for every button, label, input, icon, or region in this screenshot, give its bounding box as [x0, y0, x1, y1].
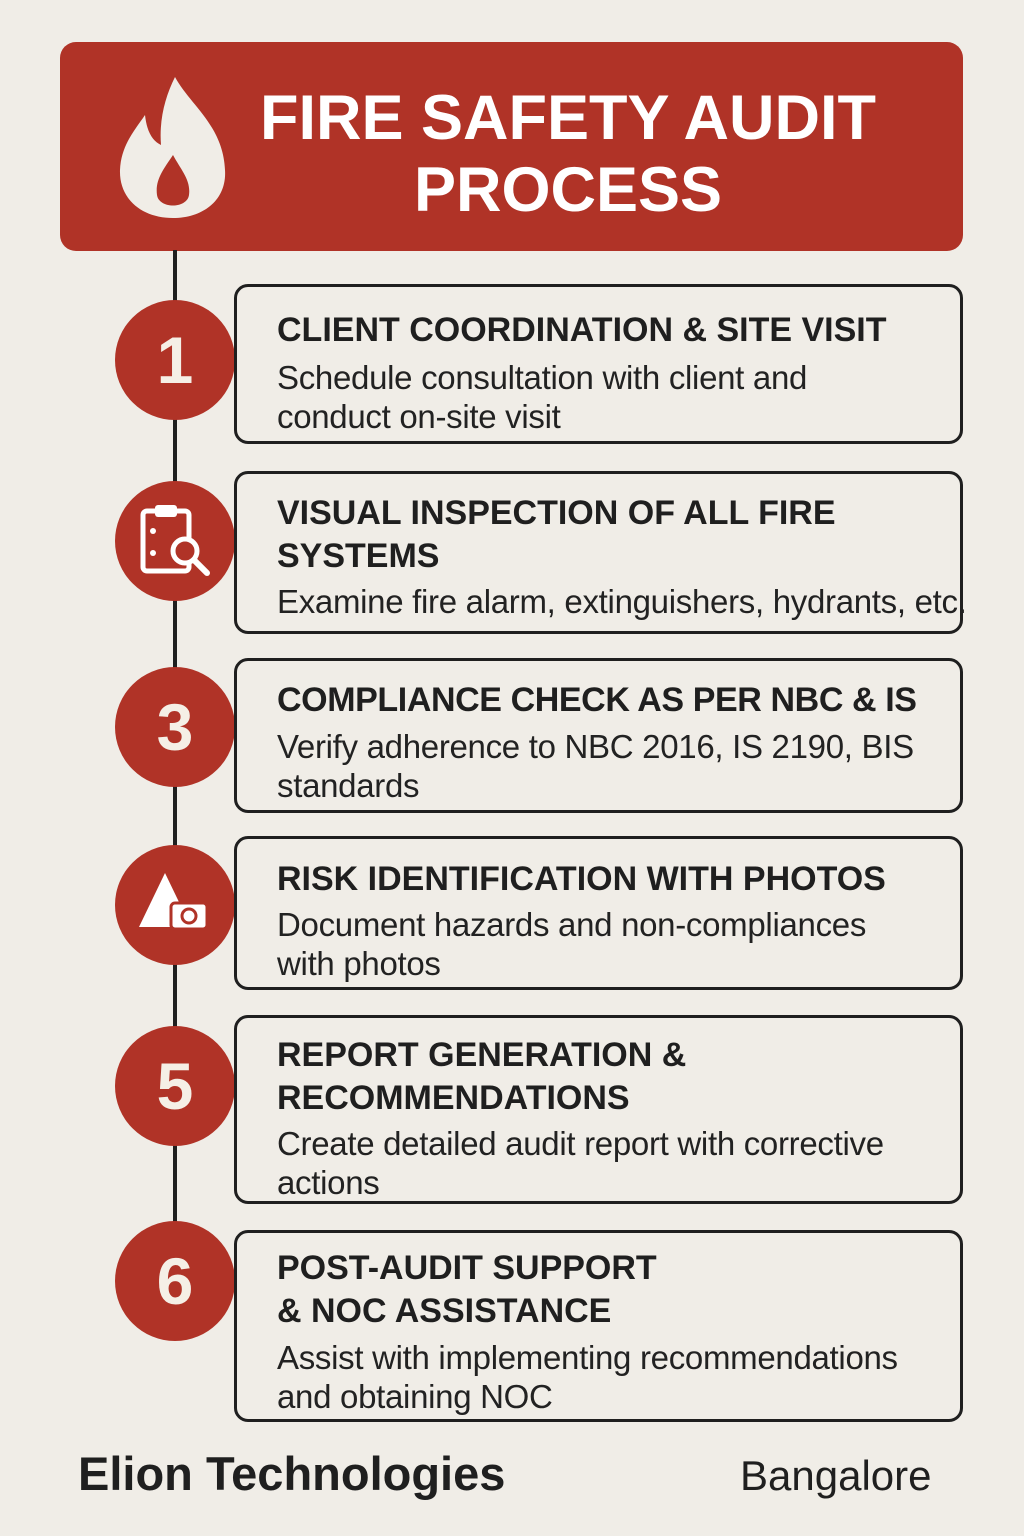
circle 5: 5	[157, 1049, 193, 1123]
box 2	[234, 471, 963, 634]
box 1	[234, 284, 963, 444]
box 5: actions	[277, 1164, 379, 1201]
title: PROCESS	[414, 155, 722, 225]
step 5	[115, 1015, 963, 1204]
box 1: Schedule consultation with client and	[277, 359, 807, 396]
circle 6	[115, 1221, 235, 1341]
box 4	[234, 836, 963, 990]
box 5: RECOMMENDATIONS	[277, 1079, 630, 1117]
box 6: Assist with implementing recommendations	[277, 1339, 898, 1376]
icon: clipboard inspection	[115, 481, 235, 601]
footer location: Bangalore	[740, 1452, 931, 1499]
box 3: standards	[277, 767, 419, 804]
box 4: Document hazards and non-compliances	[277, 906, 866, 943]
title	[260, 83, 876, 225]
step 2	[115, 471, 967, 634]
step 4	[115, 836, 963, 990]
title: FIRE SAFETY AUDIT	[260, 83, 876, 153]
timeline line	[173, 250, 177, 1240]
step 1	[115, 284, 963, 444]
box 2: SYSTEMS	[277, 537, 439, 575]
step 6	[115, 1221, 963, 1422]
circle 3: 3	[157, 690, 193, 764]
circle 3	[115, 667, 235, 787]
circle 1	[115, 300, 235, 420]
box 4: RISK IDENTIFICATION WITH PHOTOS	[277, 860, 886, 898]
box 6: POST-AUDIT SUPPORT	[277, 1249, 657, 1287]
header banner	[60, 42, 963, 251]
box 1: CLIENT COORDINATION & SITE VISIT	[277, 311, 886, 349]
box 6	[234, 1230, 963, 1422]
box 2: VISUAL INSPECTION OF ALL FIRE	[277, 494, 836, 532]
box 1: conduct on-site visit	[277, 398, 560, 435]
box 5: REPORT GENERATION &	[277, 1036, 686, 1074]
circle 1: 1	[157, 323, 193, 397]
box 3	[234, 658, 963, 813]
box 3: Verify adherence to NBC 2016, IS 2190, BIS	[277, 728, 914, 765]
circle 6: 6	[157, 1244, 193, 1318]
circle 5	[115, 1026, 235, 1146]
box 5	[234, 1015, 963, 1204]
box 5: Create detailed audit report with corrective	[277, 1125, 884, 1162]
box 2: Examine fire alarm, extinguishers, hydrants, etc.	[277, 583, 967, 620]
box 6: & NOC ASSISTANCE	[277, 1292, 611, 1330]
box 6: and obtaining NOC	[277, 1378, 553, 1415]
box 4: with photos	[277, 945, 441, 982]
icon: flame	[120, 77, 226, 218]
step 3	[115, 658, 963, 813]
footer company: Elion Technologies	[78, 1447, 505, 1500]
icon: warning camera	[115, 845, 235, 965]
box 3: COMPLIANCE CHECK AS PER NBC & IS	[277, 681, 917, 719]
